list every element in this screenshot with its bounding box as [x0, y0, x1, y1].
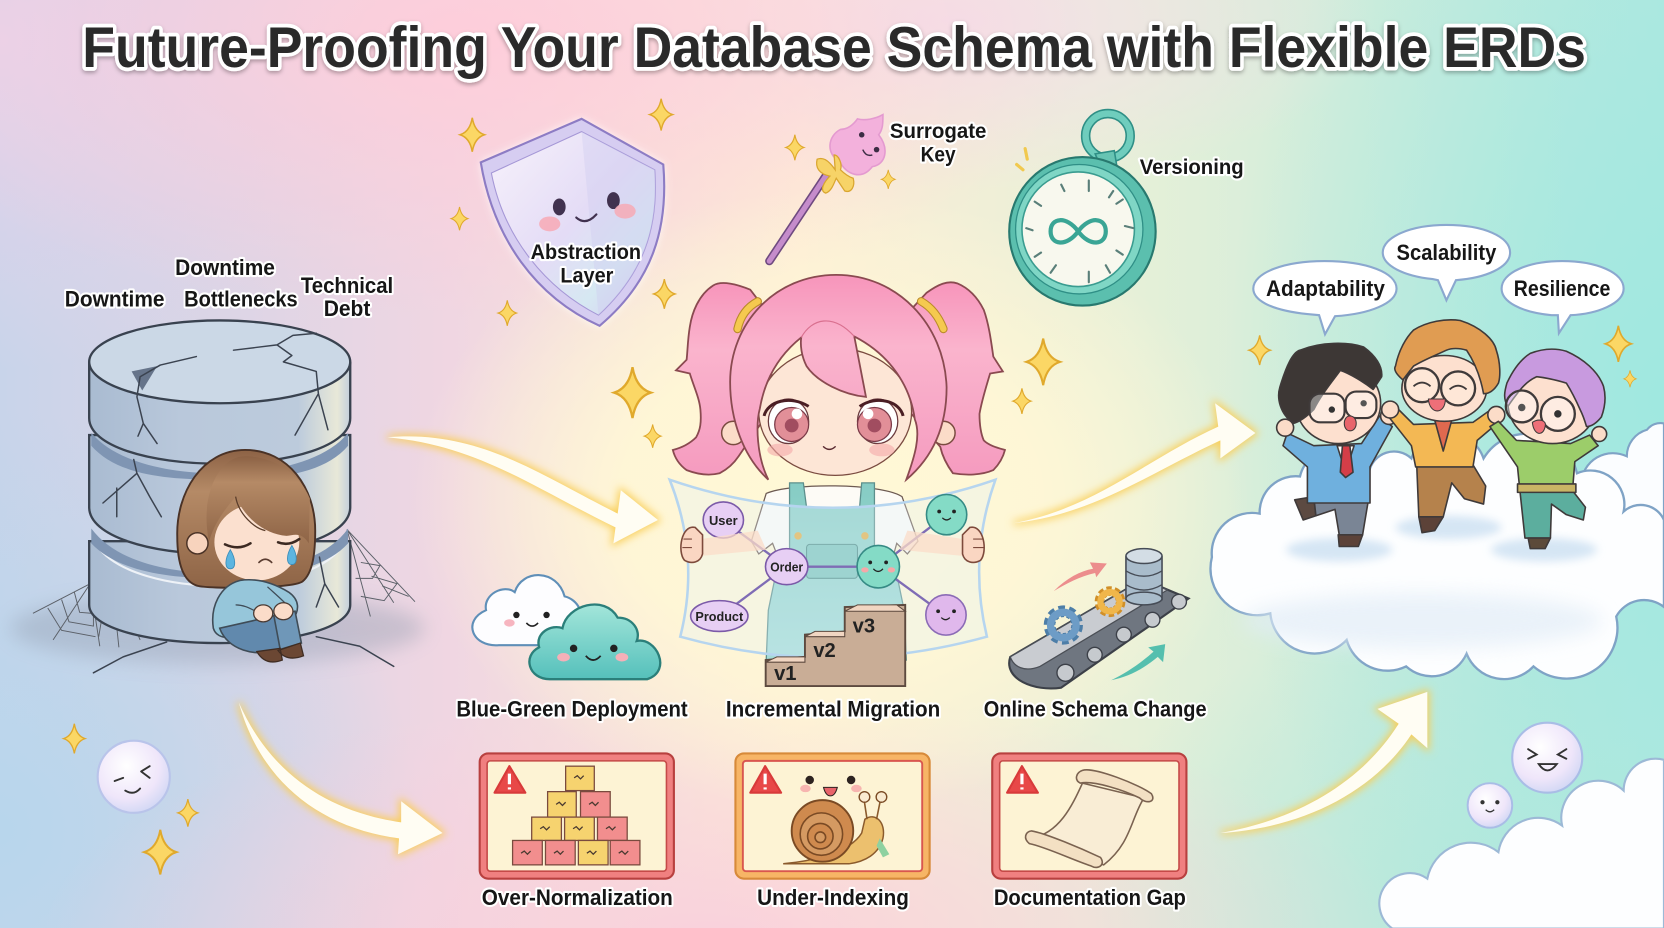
- caption: Blue-Green Deployment: Blue-Green Deployment: [456, 696, 688, 721]
- caption: Online Schema Change: Online Schema Change: [984, 696, 1207, 721]
- transparent ERD sheet: [670, 480, 995, 658]
- bubble: small: [1468, 783, 1512, 828]
- ERD node: Product: [691, 601, 748, 631]
- warning card: Under-Indexing: [735, 753, 930, 879]
- title: Future-Proofing Your Database Schema with Flexible ERDs: [82, 16, 1586, 80]
- cloud: right back: [1581, 423, 1664, 594]
- arrow: pitfalls to team: [1220, 692, 1427, 833]
- label: Technical Debt: [301, 273, 393, 321]
- ERD node: User: User: [709, 513, 738, 528]
- label: Technical Debt: Debt: [324, 296, 371, 321]
- icon: crystal shield, Abstraction Layer: Layer: [560, 264, 613, 287]
- hair front and fringe: [730, 275, 947, 480]
- speech bubble: Scalability: Scalability: [1397, 240, 1496, 265]
- icon: conveyor, gears and database, Online Schema Change: [1009, 549, 1189, 688]
- blank scroll: [1026, 770, 1153, 867]
- versioned stairs v1 v2 v3: v1: [774, 663, 797, 685]
- ERD node: Order: Order: [770, 559, 803, 574]
- caption: Incremental Migration: Incremental Migration: [726, 696, 940, 721]
- speech bubble: Adaptability: [1253, 261, 1397, 334]
- arrow: problem to hero: [387, 436, 658, 543]
- cracks: [93, 333, 394, 673]
- pigtails: [673, 282, 1005, 475]
- snail: [783, 792, 889, 864]
- sparkles: [64, 99, 1636, 874]
- ERD node: purple face: [926, 595, 966, 635]
- icon: twin clouds, Blue-Green Deployment: [472, 575, 660, 679]
- icon: stopwatch, Versioning: Versioning: [1140, 156, 1244, 179]
- warning triangle: [495, 766, 525, 793]
- mouth and blush: [767, 444, 895, 456]
- caption: Documentation Gap: Documentation Gap: [994, 885, 1186, 910]
- icon: stopwatch, Versioning: [1009, 114, 1244, 306]
- warning card: Documentation Gap: [992, 753, 1186, 879]
- sad girl: [177, 450, 315, 662]
- warning triangle: [750, 766, 781, 793]
- arrow: problem to pitfalls: [239, 702, 443, 854]
- icon: crystal shield, Abstraction Layer: [481, 119, 664, 326]
- ERD node: Order: [765, 549, 808, 585]
- speech bubble: Scalability: [1383, 225, 1510, 300]
- smiling face: [800, 776, 862, 796]
- cloud: bottom right corner: [1379, 759, 1664, 928]
- caption: Over-Normalization: Over-Normalization: [482, 885, 673, 910]
- versioned stairs v1 v2 v3: v2: [813, 640, 836, 662]
- speech bubble: Resilience: [1502, 261, 1624, 333]
- legs: [220, 615, 280, 653]
- label: Downtime Bottlenecks: [175, 255, 298, 312]
- block pyramid: [513, 766, 640, 865]
- ERD node: User: [703, 502, 743, 538]
- arms and hands holding sheet: [681, 527, 984, 562]
- label: Downtime: Downtime: [65, 287, 165, 312]
- ERD node: Product: Product: [695, 609, 744, 624]
- bubble: winking left: [98, 741, 170, 813]
- hero: pink-haired girl: [670, 275, 1005, 686]
- warning card: Over-Normalization: [480, 753, 674, 879]
- group: cracked legacy database with sad girl: [11, 320, 425, 673]
- character: orange-haired developer in yellow: [1382, 320, 1505, 533]
- face: [759, 348, 912, 475]
- speech bubble: Resilience: Resilience: [1514, 276, 1610, 301]
- ERD node: teal face top: [926, 495, 967, 535]
- ground shadow: [11, 592, 425, 664]
- eyes: [764, 399, 903, 444]
- caption: Under-Indexing: Under-Indexing: [757, 885, 909, 910]
- shoes: [257, 643, 304, 662]
- icon: magic wand, Surrogate Key: [769, 115, 987, 261]
- versioned stairs v1 v2 v3: [766, 605, 905, 686]
- icon: crystal shield, Abstraction Layer: Abstraction: [531, 241, 641, 264]
- character: dark-haired developer in blue: [1277, 343, 1398, 547]
- character: purple-haired developer in green: [1490, 349, 1607, 549]
- speech bubble: Adaptability: Adaptability: [1266, 276, 1385, 301]
- sweater: [213, 580, 298, 637]
- bubble: happy large: [1512, 723, 1582, 793]
- versioned stairs v1 v2 v3: v3: [853, 615, 875, 637]
- cobwebs: [33, 530, 415, 647]
- ears: [722, 421, 745, 445]
- label: Downtime Bottlenecks: Bottlenecks: [184, 287, 298, 312]
- icon: magic wand, Surrogate Key: Surrogate: [890, 120, 987, 143]
- cloud: main platform: [1210, 433, 1664, 679]
- arrow: hero to team: [1013, 403, 1255, 523]
- database cylinder: [89, 320, 394, 673]
- icon: magic wand, Surrogate Key: Key: [921, 143, 956, 166]
- torso and overalls: [751, 483, 918, 660]
- ERD node: teal face middle: [857, 545, 899, 588]
- warning triangle: [1007, 766, 1038, 793]
- label: Downtime Bottlenecks: Downtime: [175, 255, 275, 280]
- label: Technical Debt: Technical: [301, 273, 393, 298]
